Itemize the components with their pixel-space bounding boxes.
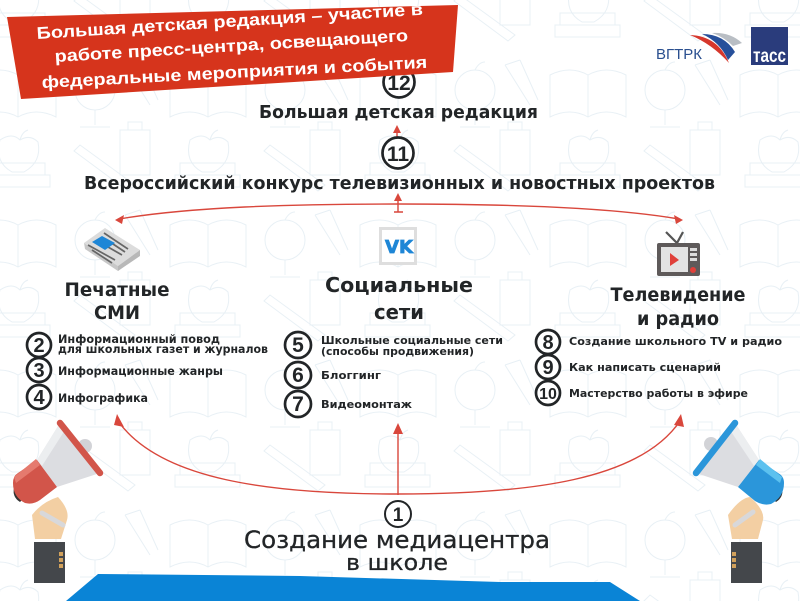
icon: blue megaphone with hand [696, 423, 784, 583]
list: television and radio [536, 330, 782, 405]
heading: media centre: Создание медиацентра [244, 526, 550, 554]
heading: contest: Всероссийский конкурс телевизионных и новостных проектов [84, 174, 715, 194]
icon: VK: VK [385, 237, 414, 258]
red title banner [7, 0, 458, 99]
red title banner: работе пресс-центра, освещающего [54, 26, 409, 66]
item 5 [285, 332, 503, 358]
heading: print media: Печатные [64, 280, 170, 301]
step 1: 1 [393, 505, 404, 526]
icon: red megaphone with hand [13, 423, 100, 583]
step 12 [384, 66, 414, 98]
item 5: 5 [292, 334, 304, 357]
item 7 [285, 391, 412, 417]
item 3 [27, 358, 223, 382]
item 4 [27, 385, 148, 409]
item 6: Блоггинг [321, 369, 381, 382]
arrow: contest to print media [115, 204, 398, 224]
item 2: 2 [33, 335, 45, 357]
arrow: contest to television [398, 204, 683, 224]
heading: television line 2: и радио [637, 308, 719, 330]
list: social networks [285, 332, 503, 417]
item 9 [536, 355, 721, 379]
bottom blue banner [66, 574, 640, 601]
item 3: Информационные жанры [58, 364, 223, 378]
heading: big children's editorial: Большая детская редакция [259, 103, 538, 123]
item 6 [285, 362, 381, 388]
item 6: 6 [292, 364, 304, 387]
heading: social networks: Социальные [325, 273, 473, 297]
logo: VGTRK [656, 33, 742, 63]
item 7: 7 [292, 393, 304, 416]
logo: VGTRK: ВГТРК [656, 46, 702, 63]
item 5: Школьные социальные сети [321, 334, 503, 347]
heading: media centre line 2: в школе [346, 551, 448, 576]
item 4: Инфографика [58, 391, 148, 405]
item 10: Мастерство работы в эфире [569, 387, 748, 400]
item 3: 3 [33, 360, 45, 382]
item 2 [27, 332, 268, 357]
heading: social networks line 2: сети [374, 300, 424, 324]
item 7: Видеомонтаж [321, 398, 412, 411]
icon: TV [657, 232, 700, 276]
item 4: 4 [33, 387, 45, 409]
connecting arrows [114, 125, 684, 495]
heading: print media line 2: СМИ [94, 303, 140, 324]
item 2: для школьных газет и журналов [58, 342, 268, 356]
item 10 [536, 381, 748, 405]
red title banner: федеральные мероприятия и события [41, 53, 428, 92]
arrow: social networks to contest [394, 193, 403, 212]
arrow: 1 to social networks [393, 423, 403, 495]
item 9: 9 [542, 357, 554, 379]
logo: TASS: тасс [753, 46, 786, 67]
item 8: 8 [542, 332, 554, 354]
item 2: Информационный повод [58, 332, 220, 346]
red title banner: Большая детская редакция – участие в [36, 0, 423, 43]
arrow: 11 to 12 [393, 125, 401, 140]
logo: TASS [751, 27, 788, 67]
icon: VK [380, 228, 416, 264]
item 10: 10 [539, 386, 557, 403]
item 9: Как написать сценарий [569, 361, 721, 374]
step 1 [385, 501, 411, 527]
step 12: 12 [387, 72, 411, 95]
list: print media [27, 332, 268, 409]
item 8 [536, 330, 782, 354]
step 11: 11 [387, 143, 409, 166]
heading: television: Телевидение [610, 284, 746, 306]
arrow: 1 to television [398, 414, 684, 494]
item 5: (способы продвижения) [321, 345, 474, 358]
item 8: Создание школьного TV и радио [569, 335, 782, 348]
icon: newspaper [84, 228, 140, 271]
arrow: 1 to print media [114, 414, 398, 494]
step 11 [382, 138, 414, 168]
